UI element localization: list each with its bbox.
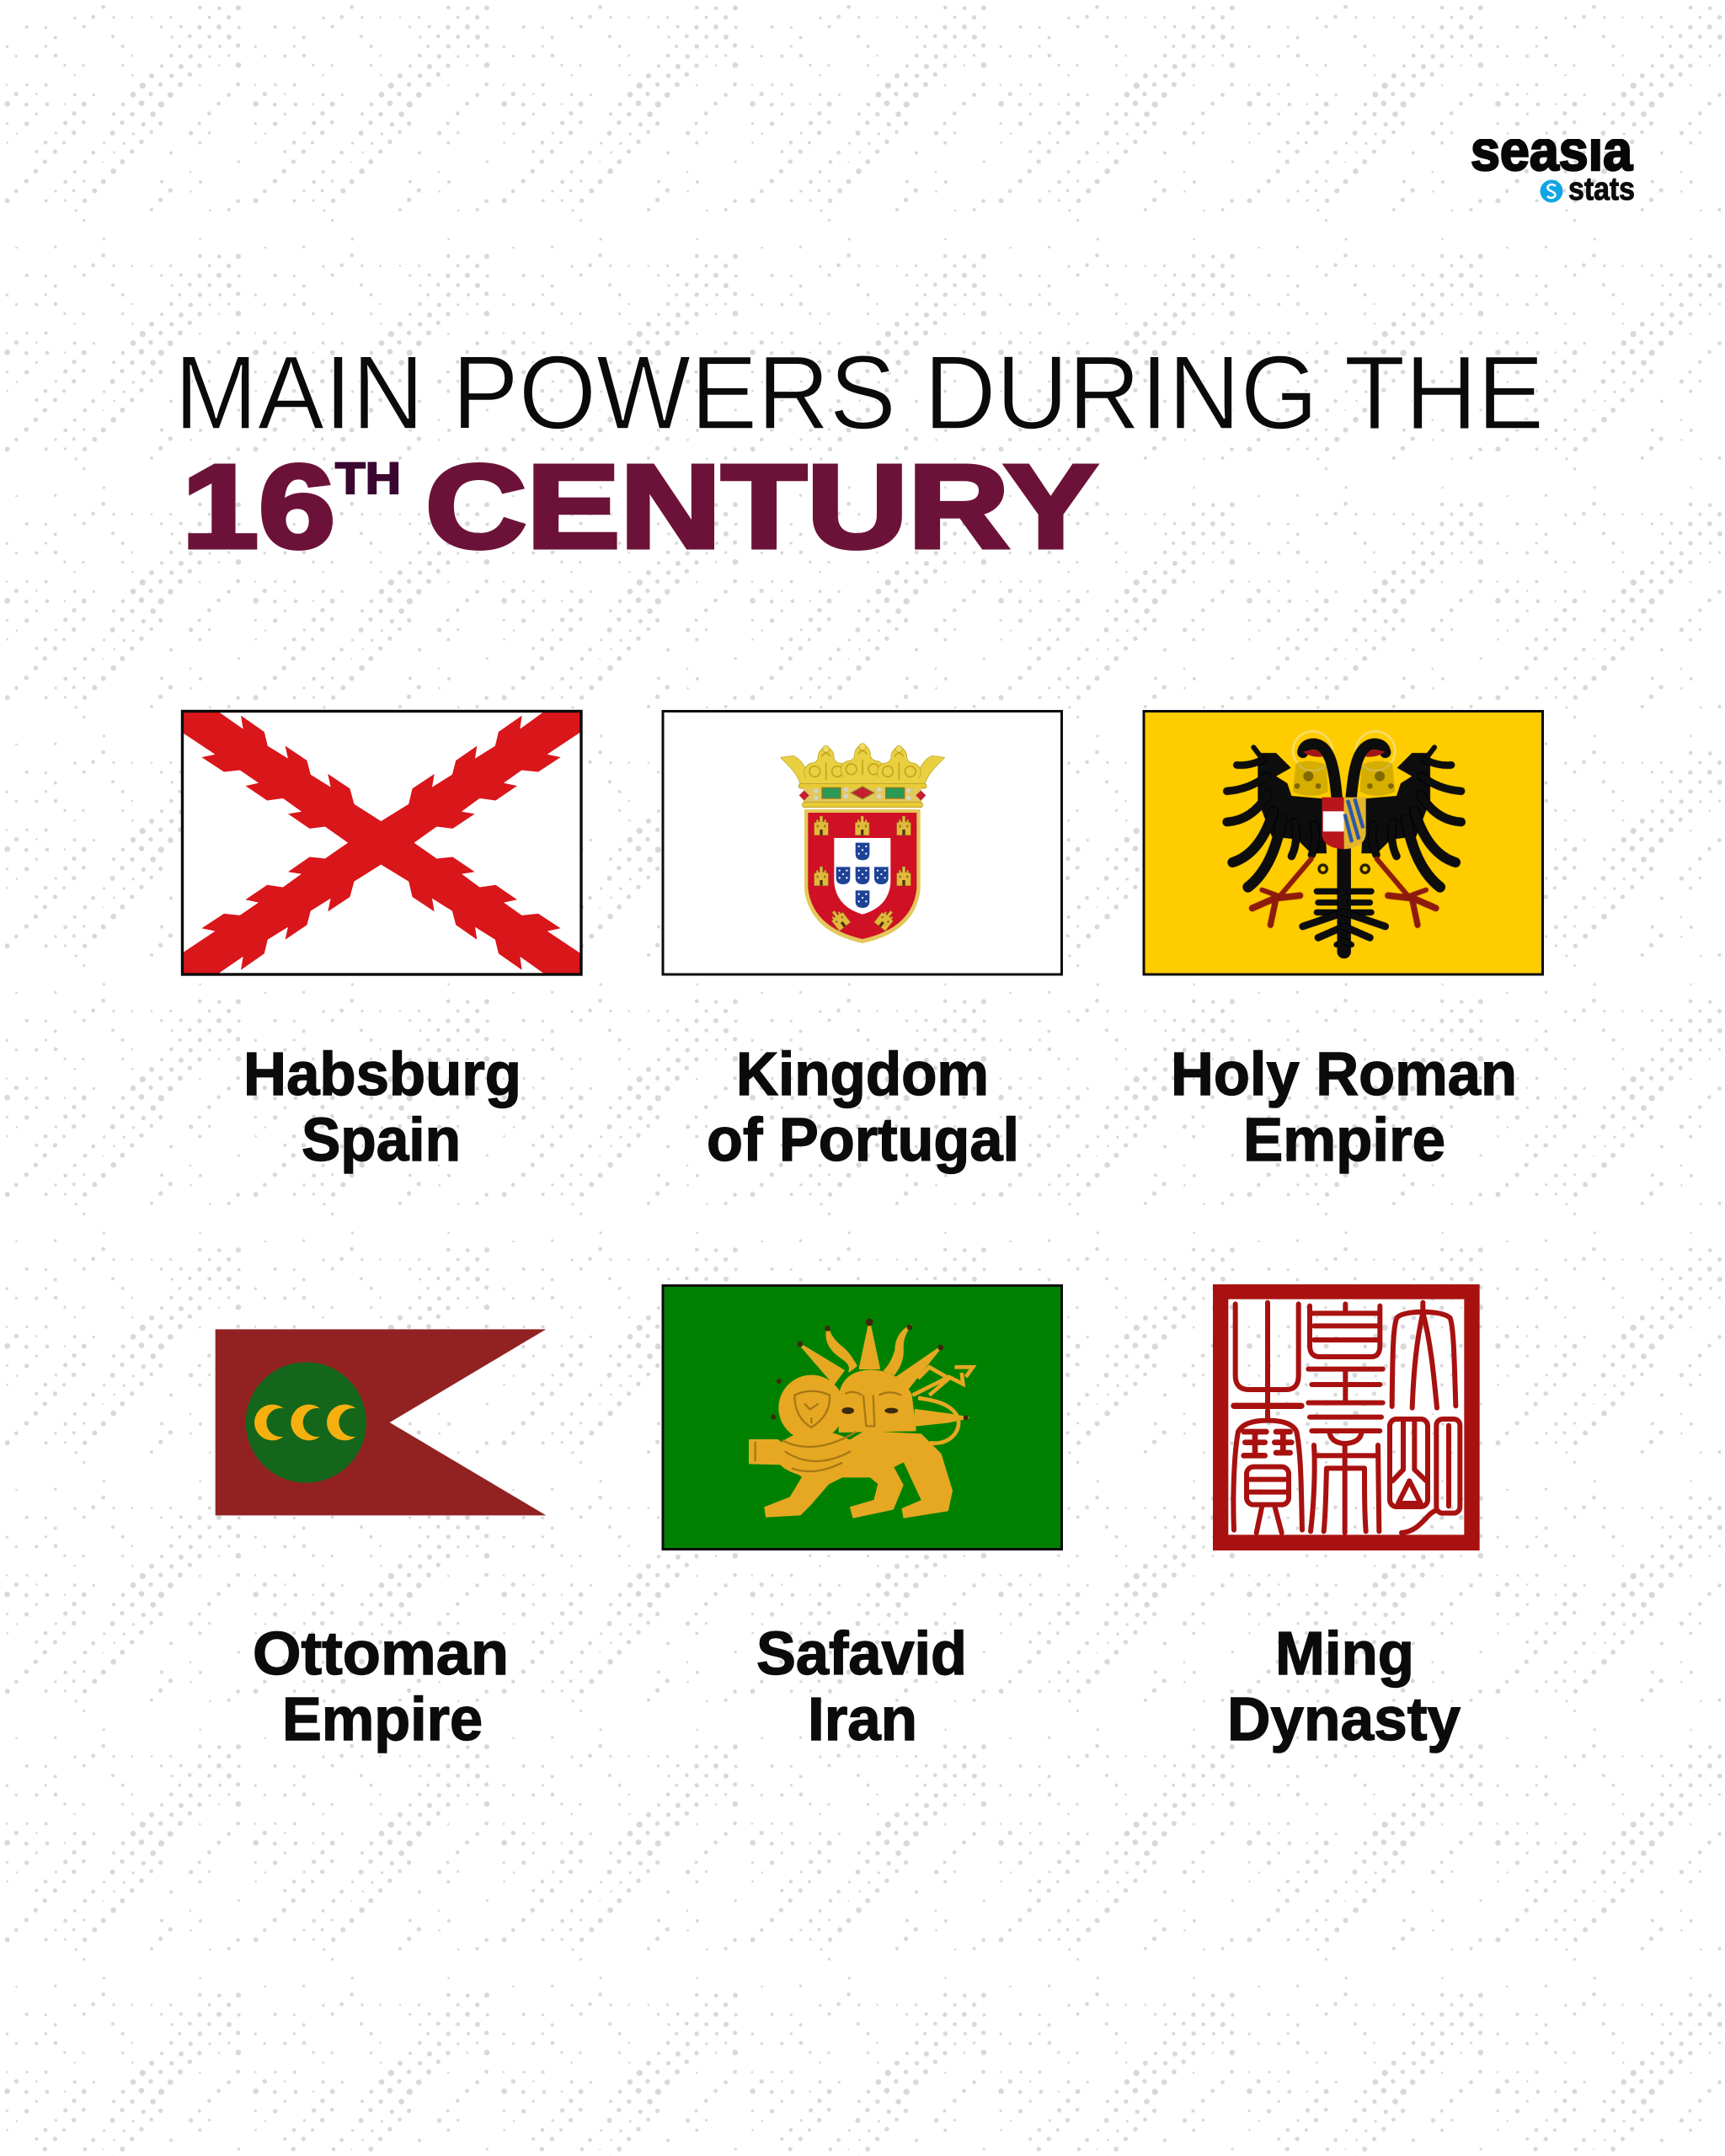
title highlight: 16th century: CENTURY <box>425 440 1097 573</box>
logo: seasia stats <box>1471 139 1634 202</box>
panel: Habsburg Spain <box>182 711 581 1174</box>
panel: Holy Roman Empire <box>1144 711 1543 1174</box>
panel: Ottoman Empire <box>216 1329 546 1753</box>
label: Ming Dynasty: Ming <box>1275 1620 1414 1688</box>
logo: seasia stats: seasia <box>1471 119 1633 183</box>
label: Habsburg Spain: Spain <box>302 1107 461 1174</box>
title <box>174 335 1544 573</box>
label: Habsburg Spain: Habsburg <box>243 1041 521 1108</box>
label: Ming Dynasty: Dynasty <box>1227 1686 1461 1753</box>
label: Holy Roman Empire: Holy Roman <box>1171 1041 1517 1108</box>
shield <box>804 809 921 943</box>
flag: Portuguese royal arms <box>663 711 1061 974</box>
icon: blue circle S <box>1540 180 1563 202</box>
seal: Great Ming imperial seal <box>1213 1284 1480 1550</box>
crown <box>781 744 945 808</box>
flag: cross of Burgundy <box>182 711 581 974</box>
label: Ottoman Empire <box>253 1620 509 1753</box>
title highlight: 16th century <box>182 440 1097 573</box>
label: Safavid Iran: Iran <box>808 1686 917 1753</box>
label: Holy Roman Empire: Empire <box>1243 1107 1445 1174</box>
label: Safavid Iran: Safavid <box>756 1620 967 1688</box>
flag: double-headed eagle <box>1144 711 1543 974</box>
logo: seasia stats: stats <box>1568 172 1635 207</box>
label: Ottoman Empire: Empire <box>282 1686 483 1753</box>
title highlight: 16th century: 16 <box>182 440 335 573</box>
panel: Safavid Iran <box>663 1285 1061 1753</box>
label: Safavid Iran <box>756 1620 967 1753</box>
flag: lion and sun <box>663 1285 1061 1550</box>
label: Holy Roman Empire <box>1171 1041 1517 1174</box>
title highlight: 16th century: TH <box>335 454 401 504</box>
label: Kingdom of Portugal: Kingdom <box>736 1041 989 1108</box>
panel: Ming Dynasty <box>1213 1284 1480 1753</box>
label: Kingdom of Portugal: of Portugal <box>707 1107 1019 1174</box>
label: Ottoman Empire: Ottoman <box>253 1620 509 1688</box>
flag: swallowtail with crescents <box>216 1329 546 1515</box>
panel: Kingdom of Portugal <box>663 711 1061 1174</box>
label: Habsburg Spain <box>243 1041 521 1174</box>
label: Kingdom of Portugal <box>707 1041 1019 1174</box>
title: MAIN POWERS DURING THE <box>174 335 1544 451</box>
label: Ming Dynasty <box>1227 1620 1461 1753</box>
